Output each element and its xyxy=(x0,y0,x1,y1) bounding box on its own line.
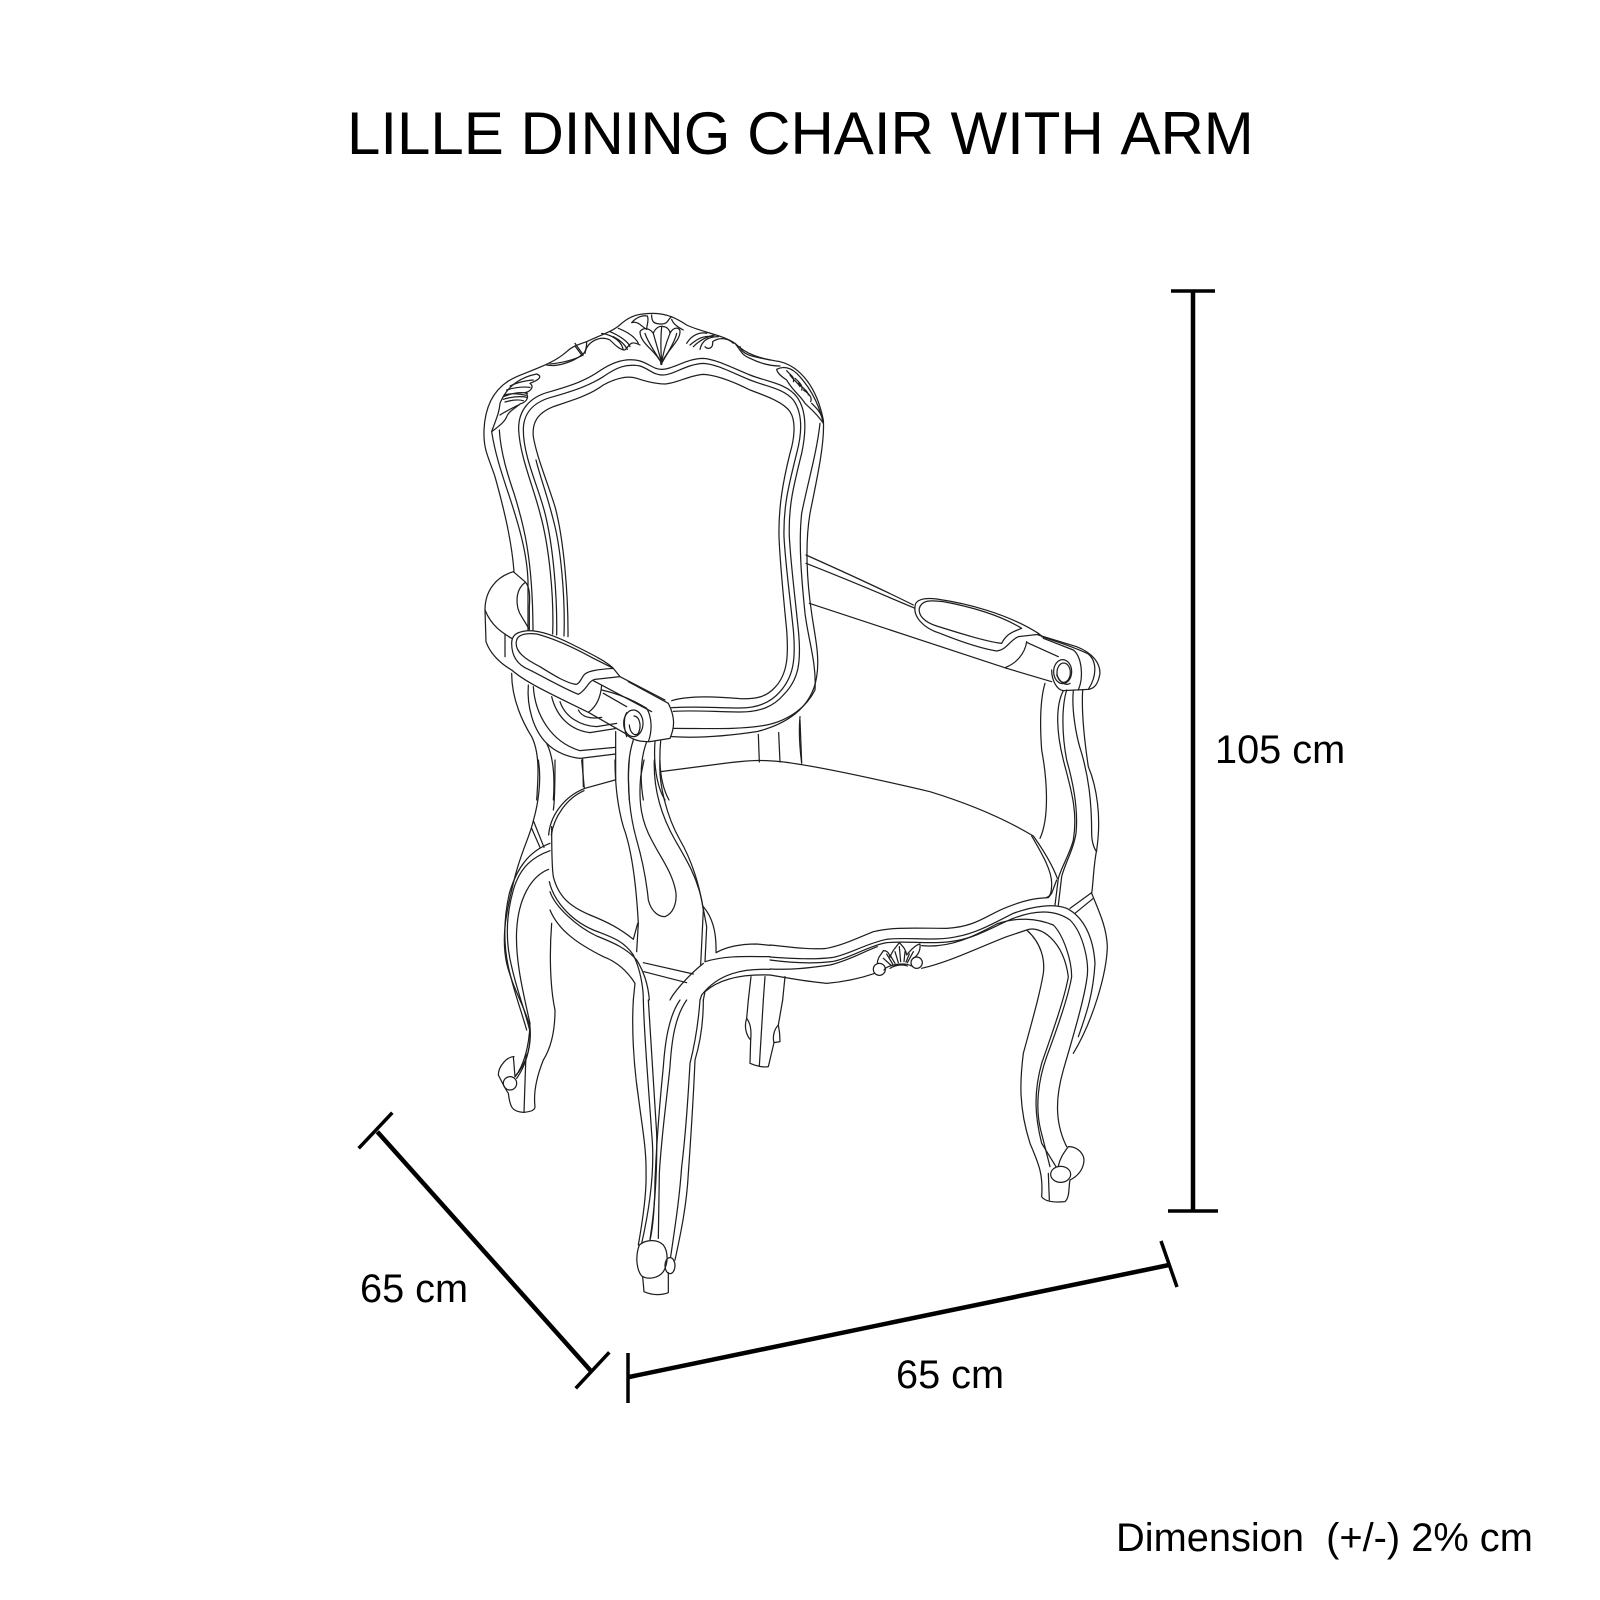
width dimension line xyxy=(628,1241,1177,1403)
front stile and rear left leg xyxy=(498,760,785,1112)
title: LILLE DINING CHAIR WITH ARM xyxy=(347,100,1254,167)
crest carving xyxy=(550,315,770,364)
right carving on back xyxy=(735,343,823,423)
height label: 105 cm xyxy=(1215,728,1345,772)
right arm and seat xyxy=(780,555,1100,913)
height dimension line xyxy=(1168,291,1218,1211)
depth label: 65 cm xyxy=(360,1267,468,1311)
width label: 65 cm xyxy=(896,1353,1004,1397)
tolerance note: Dimension (+/-) 2% cm xyxy=(1116,1516,1533,1560)
rail carving xyxy=(873,943,922,975)
chair back frame xyxy=(484,313,824,762)
chair line drawing xyxy=(484,313,1107,1295)
left arm xyxy=(485,572,674,800)
front rail and right front leg xyxy=(770,880,1107,1202)
depth dimension line xyxy=(359,1113,609,1388)
left carving on back xyxy=(492,342,587,432)
front leg and rear foot xyxy=(633,1000,783,1295)
dimension lines xyxy=(359,291,1218,1403)
